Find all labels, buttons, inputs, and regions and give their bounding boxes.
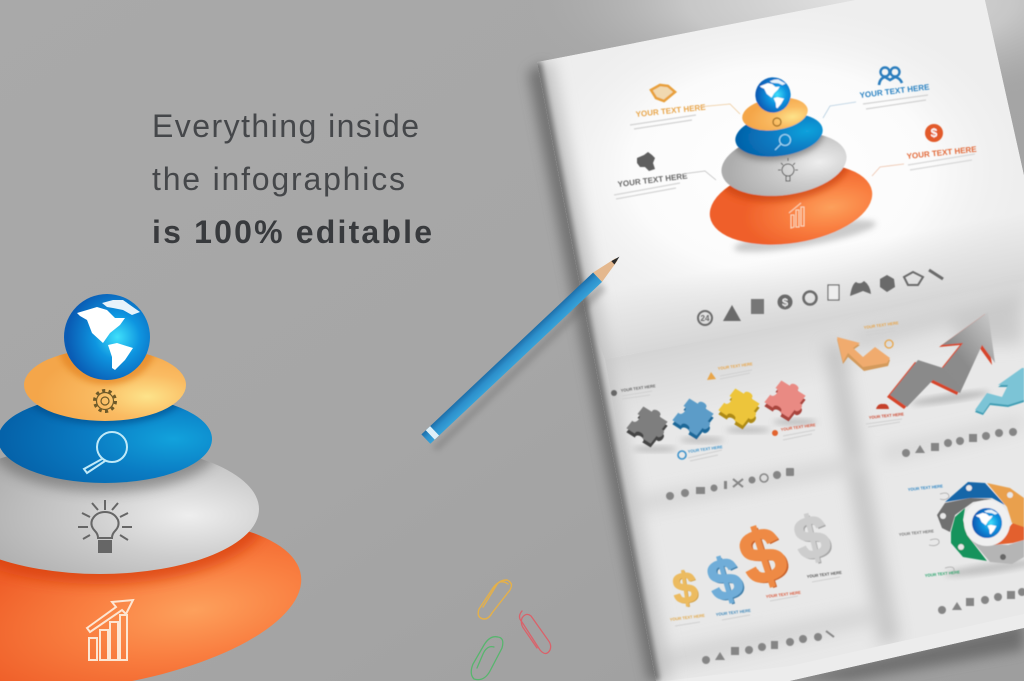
globe <box>971 507 1003 539</box>
headline text: the infographics <box>152 161 405 197</box>
callout: orange handshake <box>630 85 740 129</box>
dollar: gold: $ <box>671 563 702 615</box>
dollar labels: YOUR TEXT HERE <box>766 590 801 599</box>
globe <box>754 76 792 114</box>
wheel person icons <box>940 485 1013 560</box>
blue pebble contact shade <box>32 404 180 428</box>
paper sheet <box>537 0 1024 681</box>
label: blue <box>678 444 723 461</box>
callout: blue people <box>823 68 931 118</box>
label: red: YOUR TEXT HERE <box>780 422 816 432</box>
callouts top page <box>614 68 978 199</box>
puzzle: blue <box>672 395 724 443</box>
pencil <box>421 252 624 451</box>
puzzle panel <box>611 361 817 461</box>
pencil ferrule <box>426 426 439 440</box>
wheel petal: green <box>951 508 987 561</box>
icon: rising bar chart <box>87 600 133 660</box>
blue pebble shadow <box>734 134 826 164</box>
top page bottom shading <box>605 237 1024 358</box>
dollar labels: YOUR TEXT HERE <box>807 570 842 579</box>
icon: bulb small <box>778 158 798 181</box>
blue pebble <box>0 404 212 483</box>
clip: red <box>520 611 551 654</box>
label: orange arrow: YOUR TEXT HERE <box>863 320 899 330</box>
icon row dollars panel <box>702 631 834 664</box>
icon row top page <box>698 270 943 325</box>
wheel labels: YOUR TEXT HERE <box>899 528 934 537</box>
gray pebble shadow <box>724 168 850 204</box>
dollar: blue: $ <box>702 545 751 617</box>
blue pebble <box>733 108 825 162</box>
dollar labels <box>670 570 842 626</box>
label: red arrow: YOUR TEXT HERE <box>869 411 904 420</box>
callout: orange handshake: YOUR TEXT HERE <box>635 103 707 119</box>
dollar: gold: $ <box>670 563 701 614</box>
wheel petal: orange <box>987 483 1024 527</box>
headline text: is 100% editable <box>152 214 432 250</box>
paper clips <box>471 580 551 680</box>
dollars panel <box>670 501 842 626</box>
callout: blue people: YOUR TEXT HERE <box>859 82 931 100</box>
yellow pebble <box>740 94 810 134</box>
stack shadow <box>732 214 878 258</box>
pencil wood tip <box>593 255 621 282</box>
blue arrow <box>975 368 1024 415</box>
clip: green <box>471 637 503 680</box>
clip: gold <box>478 580 511 619</box>
orange pebble contact shade <box>0 532 264 590</box>
headline text: Everything inside <box>152 108 419 144</box>
lower white page edge <box>876 628 1024 652</box>
label: blue: YOUR TEXT HERE <box>687 444 723 454</box>
spine shading <box>537 62 656 681</box>
dollar: orange: $ <box>732 511 799 605</box>
gray arrow <box>887 312 995 409</box>
wheel shadow <box>944 556 1024 580</box>
gray pebble <box>717 125 851 203</box>
icon row top page: $ <box>782 297 788 309</box>
callout: gray puzzle <box>614 152 716 199</box>
icon: gear <box>94 390 116 412</box>
icon row top page: 24 <box>701 314 710 323</box>
orange pebble <box>704 153 878 255</box>
callout: red dollar: $ <box>931 126 938 140</box>
wheel petal: red <box>993 513 1024 545</box>
label: gray <box>611 383 656 399</box>
wheel petal: dark gray <box>937 498 992 532</box>
icon: chart small <box>789 203 804 228</box>
wheel labels <box>899 483 960 578</box>
label: red <box>772 422 816 440</box>
wheel labels: YOUR TEXT HERE <box>908 483 943 492</box>
callout: red dollar: YOUR TEXT HERE <box>906 145 978 161</box>
globe <box>64 294 150 380</box>
hexagon wheel panel <box>899 482 1024 580</box>
wheel labels: YOUR TEXT HERE <box>925 569 960 578</box>
puzzle: red <box>764 377 817 425</box>
arrows panel <box>837 312 1024 427</box>
label: gray: YOUR TEXT HERE <box>620 383 656 393</box>
yellow pebble <box>24 353 186 421</box>
icon row arrows panel <box>902 428 1017 457</box>
wheel petal: blue <box>945 482 1005 505</box>
gray pebble contact shade <box>0 456 216 498</box>
puzzle: yellow <box>718 385 770 433</box>
top page pebble stack <box>704 76 878 258</box>
puzzle: gray <box>626 403 677 452</box>
brochure shadow <box>528 62 1024 681</box>
top page glow <box>608 52 953 280</box>
yellow pebble contact shade <box>58 353 156 388</box>
dollar: blue: $ <box>700 544 749 615</box>
icon: magnifier small <box>775 134 790 150</box>
gray pebble <box>0 456 259 574</box>
brochure mockup <box>530 0 1024 681</box>
label: orange arrow <box>863 320 899 348</box>
dollar: orange: $ <box>730 510 796 603</box>
icon row wheel panel <box>938 588 1024 614</box>
icon: light bulb <box>78 500 132 553</box>
icon: gear small <box>773 118 781 126</box>
icon: magnifier <box>84 432 127 473</box>
wheel petal: light gray <box>967 535 1024 564</box>
callout: red dollar <box>872 124 978 176</box>
label: orange: YOUR TEXT HERE <box>717 361 753 371</box>
dollar labels: YOUR TEXT HERE <box>716 608 751 617</box>
dollar: gray: $ <box>790 503 838 576</box>
dollar labels: YOUR TEXT HERE <box>670 613 705 622</box>
fold shading <box>632 290 1024 675</box>
orange pebble <box>0 532 302 681</box>
label: red arrow <box>866 404 904 427</box>
lower pages block <box>606 282 1024 420</box>
callout: gray puzzle: YOUR TEXT HERE <box>617 171 689 189</box>
orange arrow <box>837 337 890 371</box>
foreground pebble stack <box>0 294 312 681</box>
pencil body <box>421 272 602 444</box>
light glow behind top of brochure <box>520 0 1024 110</box>
pencil lead <box>611 255 621 264</box>
label: orange <box>707 361 753 380</box>
headline text <box>152 108 432 250</box>
dollar: gray: $ <box>788 501 836 574</box>
wheel center ring <box>964 500 1010 546</box>
icon row puzzle panel <box>666 468 794 500</box>
pencil shadow <box>432 283 606 451</box>
